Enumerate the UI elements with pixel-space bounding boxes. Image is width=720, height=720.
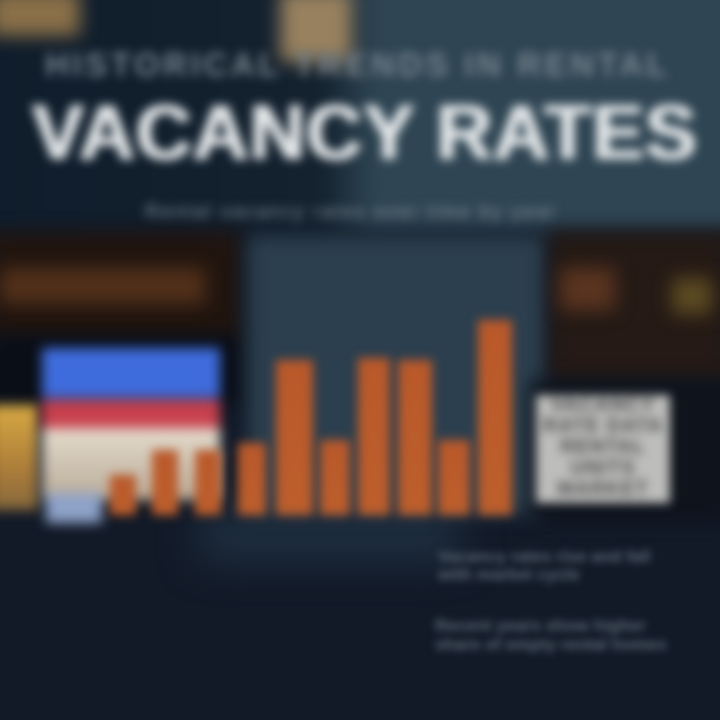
background: header slate	[0, 0, 720, 230]
bar 10	[478, 320, 512, 515]
panel: left photo band	[0, 232, 240, 342]
bar 7	[358, 358, 390, 515]
bar 2	[152, 450, 178, 515]
bar 1	[110, 475, 136, 515]
panel: right gold highlight	[672, 278, 712, 314]
bar 3	[195, 450, 221, 515]
subtitle: Rental vacancy rates over time by year	[145, 202, 557, 223]
card: colourful legend	[32, 338, 230, 532]
text block: lower note: Recent years show higher share of empty rental homes	[435, 616, 666, 654]
main title: VACANCY RATES	[32, 88, 697, 176]
bar 8	[398, 360, 432, 515]
bar 4	[238, 443, 266, 515]
icon: gold tile	[0, 405, 38, 510]
bar 5	[276, 360, 313, 515]
card: blue header	[42, 348, 220, 398]
bar 9	[438, 440, 470, 515]
panel: chart background	[248, 236, 546, 514]
photo patch: top left gold	[0, 0, 80, 36]
bar 6	[320, 440, 350, 515]
card: bottom blue	[46, 493, 102, 523]
callout: white stat box: VACANCY RATE DATA RENTAL UNITS MARKET	[543, 395, 663, 500]
card: cream body	[42, 428, 220, 500]
panel: left lower dark	[0, 335, 240, 405]
top title line: HISTORICAL TRENDS IN RENTAL	[45, 46, 670, 83]
text block: upper note: Vacancy rates rise and fall with market cycle	[438, 548, 651, 584]
photo patch: top centre gold	[280, 0, 352, 62]
background: lower glow	[200, 510, 460, 560]
panel: right photo	[550, 232, 720, 382]
panel: left photo highlight	[0, 268, 205, 304]
panel: right lower dark	[530, 380, 720, 520]
panel: right photo highlight	[560, 268, 615, 310]
card: red band	[42, 400, 220, 430]
